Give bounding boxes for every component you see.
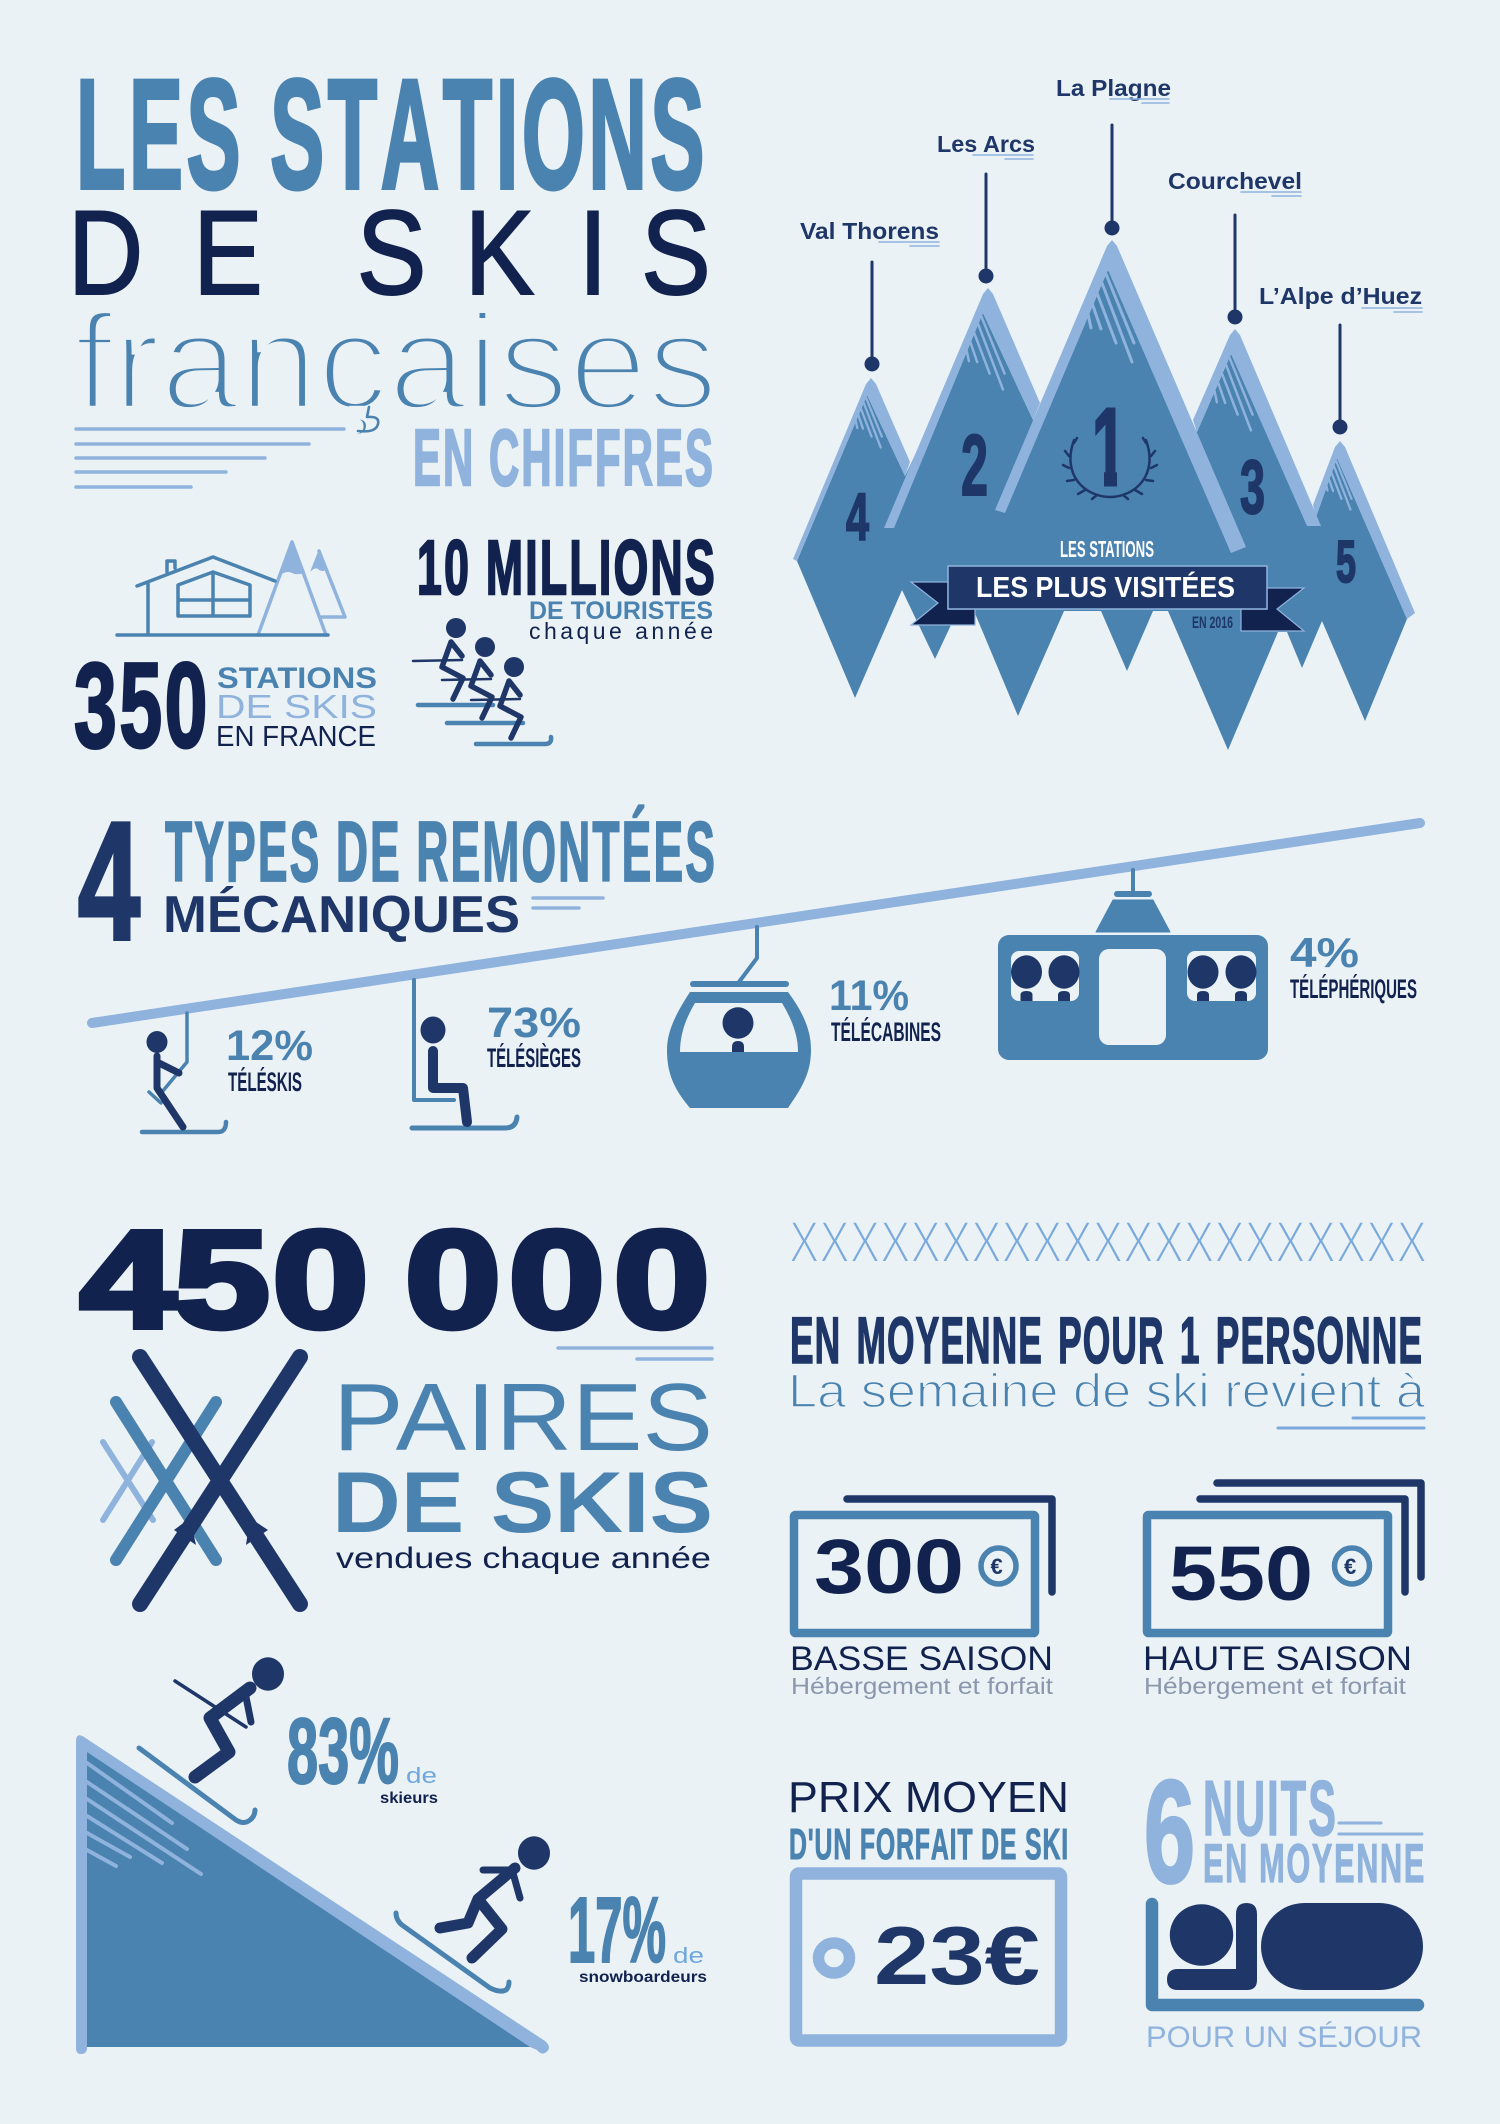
resort labels: L’Alpe d’Huez — [1259, 283, 1422, 309]
rank numbers: 2 — [961, 418, 988, 514]
icon: cable car — [998, 870, 1268, 1060]
panel: weekly cost — [788, 1210, 1427, 1699]
icon: skier — [139, 1657, 284, 1822]
amount 550: 550 — [1169, 1531, 1313, 1617]
icon: snowboarder — [396, 1836, 550, 1991]
rank numbers: 5 — [1336, 529, 1356, 595]
cable — [92, 823, 1420, 1023]
label hébergement: Hébergement et forfait — [791, 1673, 1054, 1699]
label nuits: NUITS — [1203, 1764, 1338, 1852]
icon: euro coin: € — [990, 1554, 1003, 1579]
label téléskis: TÉLÉSKIS — [228, 1066, 302, 1097]
icon: bed with sleeper — [1152, 1903, 1423, 2005]
label de: de — [673, 1943, 704, 1968]
label pour un séjour: POUR UN SÉJOUR — [1146, 2021, 1422, 2054]
number 350: 350 — [74, 637, 210, 773]
card: haute saison — [1143, 1483, 1421, 1699]
lift: télécabine — [667, 927, 941, 1108]
rank numbers: 3 — [1240, 445, 1265, 530]
resort labels: Courchevel — [1168, 168, 1302, 194]
percent 17: 17% — [568, 1878, 666, 1982]
stat: 350 stations — [74, 540, 377, 773]
pins and underlines — [864, 99, 1422, 434]
title: de skis: DE SKIS — [0, 185, 711, 320]
label haute saison: HAUTE SAISON — [1143, 1640, 1412, 1678]
banner — [911, 566, 1304, 631]
label snowboardeurs: snowboardeurs — [579, 1969, 707, 1986]
label hébergement: Hébergement et forfait — [1144, 1673, 1407, 1699]
label basse saison: BASSE SAISON — [790, 1640, 1053, 1678]
subheading: La semaine de ski revient à — [788, 1364, 1426, 1417]
label de: de — [406, 1763, 437, 1788]
banner: LES PLUS VISITÉES — [976, 570, 1235, 604]
icon: chalet and mountains — [117, 540, 345, 635]
panel: most visited resorts — [793, 75, 1422, 750]
label les stations: LES STATIONS — [1060, 536, 1154, 562]
label chaque année: chaque année — [529, 618, 713, 644]
panel: skiers vs snowboarders — [76, 1657, 707, 2054]
label paires: PAIRES — [333, 1364, 713, 1471]
panel: six nights — [1144, 1750, 1426, 2054]
percent 11: 11% — [829, 972, 909, 1020]
icon: ticket — [796, 1874, 1061, 2040]
icon: euro coin — [1334, 1548, 1370, 1584]
number 6: 6 — [1144, 1750, 1195, 1913]
label prix moyen: PRIX MOYEN — [788, 1773, 1069, 1822]
heading types de remontées: TYPES DE REMONTÉES — [165, 805, 717, 900]
rank numbers: 4 — [846, 480, 869, 555]
label skieurs: skieurs — [380, 1790, 438, 1807]
label de touristes: DE TOURISTES — [529, 597, 713, 625]
percent 73: 73% — [487, 999, 581, 1047]
number 450 000: 450 000 — [80, 1203, 710, 1357]
resort labels: La Plagne — [1056, 75, 1171, 101]
icon: t-bar skier — [142, 1013, 226, 1132]
icon: laurel wreath — [1063, 438, 1157, 499]
amount 300: 300 — [814, 1524, 964, 1610]
resort labels — [800, 75, 1422, 309]
panel: lift types — [78, 787, 1420, 1132]
title block — [0, 48, 718, 502]
panel: ski pass price — [788, 1773, 1069, 2040]
lift: télésiège — [412, 980, 581, 1128]
lift: téléski — [142, 1013, 313, 1132]
label en france: EN FRANCE — [216, 721, 376, 753]
icon: three skiers on chairlift — [413, 618, 551, 744]
label vendues chaque année: vendues chaque année — [336, 1542, 711, 1575]
icon: gondola — [667, 927, 811, 1108]
label télécabines: TÉLÉCABINES — [831, 1016, 941, 1047]
icon: euro coin: € — [1344, 1554, 1356, 1579]
icon: bills — [1147, 1483, 1421, 1633]
panel: pairs of skis — [80, 1203, 713, 1604]
resort labels: Les Arcs — [937, 131, 1035, 157]
icon: euro coin — [981, 1548, 1016, 1584]
rank numbers — [846, 386, 1356, 595]
label stations: STATIONS — [217, 662, 377, 695]
heading mécaniques: MÉCANIQUES — [163, 886, 520, 944]
label de skis: DE SKIS — [332, 1455, 713, 1551]
label d'un forfait de ski: D'UN FORFAIT DE SKI — [789, 1820, 1069, 1869]
percent 12: 12% — [226, 1022, 313, 1070]
percent 4: 4% — [1290, 929, 1359, 976]
icon: chair — [412, 980, 517, 1128]
card: basse saison — [790, 1499, 1054, 1699]
icon: crossed skis — [103, 1357, 300, 1604]
mountains silhouette — [797, 270, 1407, 750]
resort labels: Val Thorens — [800, 218, 939, 244]
slope — [76, 1735, 549, 2054]
label en 2016: EN 2016 — [1192, 613, 1233, 632]
label télésièges: TÉLÉSIÈGES — [487, 1042, 581, 1073]
number 10 millions: 10 MILLIONS — [417, 525, 717, 611]
label de skis: DE SKIS — [216, 688, 377, 725]
percent 83: 83% — [287, 1699, 399, 1803]
title: les stations: LES STATIONS — [76, 48, 708, 222]
price 23€: 23€ — [874, 1909, 1040, 2002]
lift: téléphérique — [998, 870, 1417, 1060]
title: en chiffres: EN CHIFFRES — [413, 413, 715, 502]
rank numbers: 1 — [1092, 386, 1126, 509]
stat: 10 millions — [413, 525, 717, 744]
title: françaises: françaises — [74, 286, 718, 439]
icon: bill — [794, 1499, 1052, 1633]
heading number 4: 4 — [78, 787, 140, 975]
